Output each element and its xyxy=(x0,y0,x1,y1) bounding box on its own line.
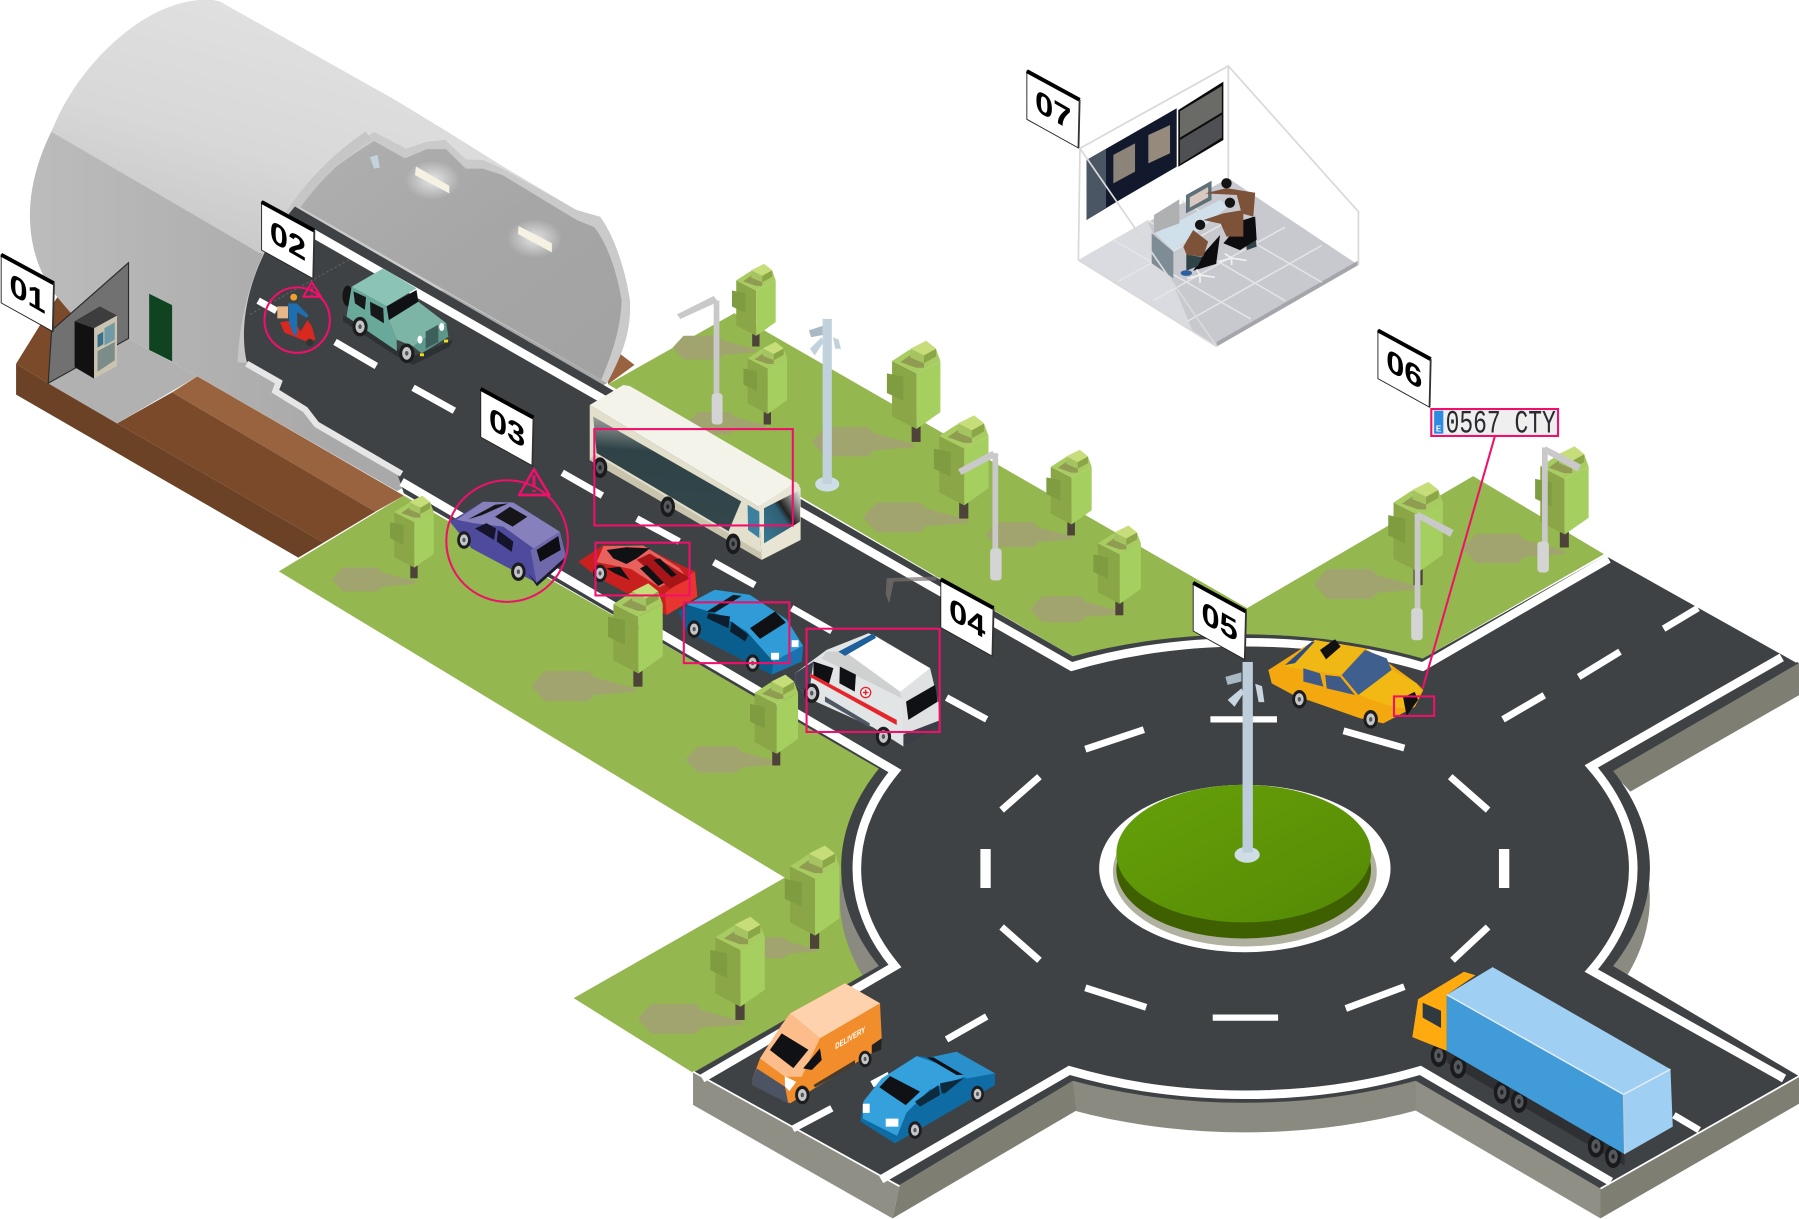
numbered marker 01: 01 xyxy=(9,267,46,322)
purple SUV xyxy=(450,502,566,586)
numbered marker 07 xyxy=(1027,71,1080,148)
license plate callout xyxy=(1431,406,1558,443)
road surface with roundabout and four arms xyxy=(244,207,1799,1189)
concrete base walls of road xyxy=(693,663,1799,1218)
road edge lines xyxy=(312,233,1799,1189)
foreground street lamps xyxy=(958,446,1581,640)
license plate callout: E xyxy=(1436,424,1442,433)
tunnel recess with door and equipment cabinet xyxy=(48,263,197,423)
lane dashes xyxy=(258,301,1699,1130)
trees xyxy=(390,264,1589,1020)
numbered marker 07: 07 xyxy=(1035,83,1071,138)
grass area north of main road xyxy=(608,313,1604,659)
numbered marker 05 xyxy=(1193,583,1246,660)
central roundabout island xyxy=(1099,785,1391,952)
numbered marker 06: 06 xyxy=(1386,342,1422,397)
grass strip south of main road xyxy=(279,496,881,1073)
control desk and monitors xyxy=(1152,181,1228,278)
delivery van: DELIVERY xyxy=(835,1024,866,1051)
camera pole on island xyxy=(1225,662,1264,863)
numbered marker 03 xyxy=(481,389,534,466)
tunnel interior ceiling xyxy=(242,132,630,383)
scooter with rider xyxy=(277,294,316,346)
jeep xyxy=(342,268,453,365)
tunnel ceiling lights and camera xyxy=(370,155,562,258)
numbered marker 01 xyxy=(1,255,54,332)
red sports car xyxy=(578,545,697,615)
bus xyxy=(590,385,801,560)
license plate callout: 0567 CTY xyxy=(1446,406,1556,443)
blue sedan in traffic xyxy=(678,590,803,675)
control room video wall xyxy=(1087,82,1223,220)
delivery van xyxy=(753,983,882,1104)
numbered marker 05: 05 xyxy=(1202,595,1238,650)
numbered marker 06 xyxy=(1378,330,1431,407)
detection frames and alert markers xyxy=(264,282,1495,732)
tunnel outer shell xyxy=(30,0,630,491)
numbered marker 03: 03 xyxy=(489,401,525,456)
numbered marker 04: 04 xyxy=(949,591,985,646)
tree shadows xyxy=(332,336,1565,1034)
street lamps and camera pole along road xyxy=(677,296,937,603)
numbered marker 02 xyxy=(262,202,314,279)
ambulance xyxy=(795,633,939,747)
control room xyxy=(1078,66,1358,346)
faint guide line xyxy=(250,259,350,314)
earth embankment under tunnel xyxy=(16,297,634,558)
articulated truck xyxy=(1412,967,1673,1168)
operators xyxy=(1181,178,1257,283)
blue sedan on lower arm xyxy=(861,1052,995,1143)
yellow taxi xyxy=(1268,639,1423,729)
numbered marker 04 xyxy=(941,579,994,656)
tunnel exit stepped edge xyxy=(247,364,402,474)
numbered marker 02: 02 xyxy=(270,214,306,269)
